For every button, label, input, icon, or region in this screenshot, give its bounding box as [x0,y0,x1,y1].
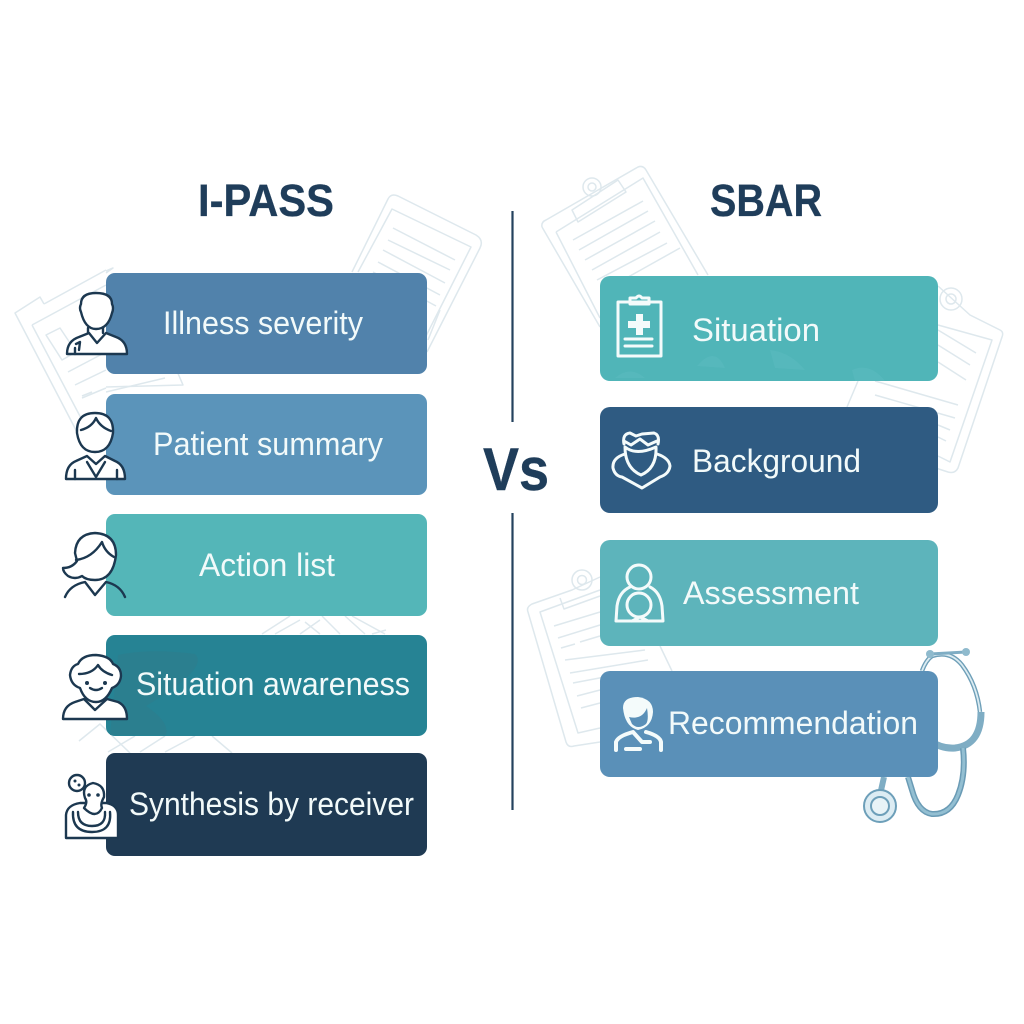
background clipboard: top left of SBAR [542,166,708,327]
card: Illness severity: Illness severity [163,305,363,341]
background clipboard: between lower I-PASS cards [79,616,386,753]
card: Assessment: Assessment [683,575,859,611]
title: SBAR: SBAR [710,175,822,226]
icon: doctor [616,697,661,750]
background clipboard: top right of I-PASS [352,195,481,352]
card: Patient summary [106,394,427,495]
icon: receiver with thought bubble [66,775,118,838]
panel: I-PASS list [63,273,427,856]
background clipboard: right of SBAR [847,286,1003,472]
icon: clinician with badge [67,293,127,354]
icon: patient with collar [66,413,125,479]
card: Recommendation: Recommendation [668,705,918,741]
card: Synthesis by receiver: Synthesis by receiver [129,786,414,822]
icon: shield with hands [613,433,670,488]
card: Recommendation [600,671,938,777]
card: Synthesis by receiver [106,753,427,856]
card: Situation awareness [106,635,427,736]
panel: SBAR list [600,276,938,777]
card: Assessment [600,540,938,646]
card: Action list: Action list [199,547,335,583]
card: Situation awareness: Situation awareness [136,666,410,702]
card: Action list [106,514,427,616]
card: Situation: Situation [692,312,820,348]
icon: person in circle [616,565,663,621]
card: Situation [600,276,938,381]
card: Background: Background [692,443,861,479]
card: Illness severity [106,273,427,374]
icon: smiling person [63,655,127,719]
background clipboard: lower left of SBAR [528,570,672,746]
background clipboard: behind Illness severity [15,268,183,432]
icon: woman with hair [63,533,125,597]
divider: centre line with Vs: Vs [483,436,549,503]
icon: medical clipboard [618,296,661,356]
title: I-PASS: I-PASS [198,175,334,226]
card: Patient summary: Patient summary [153,426,383,462]
card: Background [600,407,938,513]
stethoscope [864,648,981,822]
